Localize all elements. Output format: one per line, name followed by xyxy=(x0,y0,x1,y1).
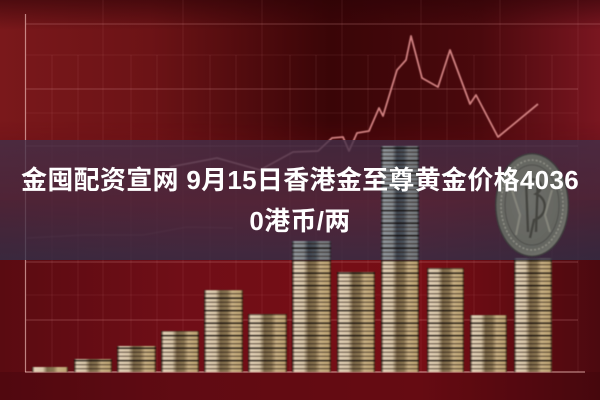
stack 2 xyxy=(74,359,112,372)
stack 1 xyxy=(32,367,68,372)
title xyxy=(21,165,579,236)
title band xyxy=(0,140,600,260)
title: 0港币/两 xyxy=(249,206,351,236)
stack 11 xyxy=(470,315,507,372)
title: 金囤配资宣网 9月15日香港金至尊黄金价格4036 xyxy=(21,165,579,195)
stack 5 xyxy=(204,290,243,372)
stack 4 xyxy=(161,331,199,372)
stack 3 xyxy=(117,346,156,372)
stack 7 xyxy=(292,260,331,372)
stack 7 top xyxy=(292,241,331,260)
shaded stack tops inside band xyxy=(292,146,419,260)
trend line xyxy=(27,36,538,238)
icon: silver coin xyxy=(495,153,569,257)
stack 9 xyxy=(381,260,419,372)
stack 8 xyxy=(337,272,375,372)
stack 9 top xyxy=(381,146,419,260)
coin stacks xyxy=(32,258,552,372)
stack 6 xyxy=(248,314,287,372)
stack 10 xyxy=(427,268,464,372)
stack 12 xyxy=(514,258,552,372)
